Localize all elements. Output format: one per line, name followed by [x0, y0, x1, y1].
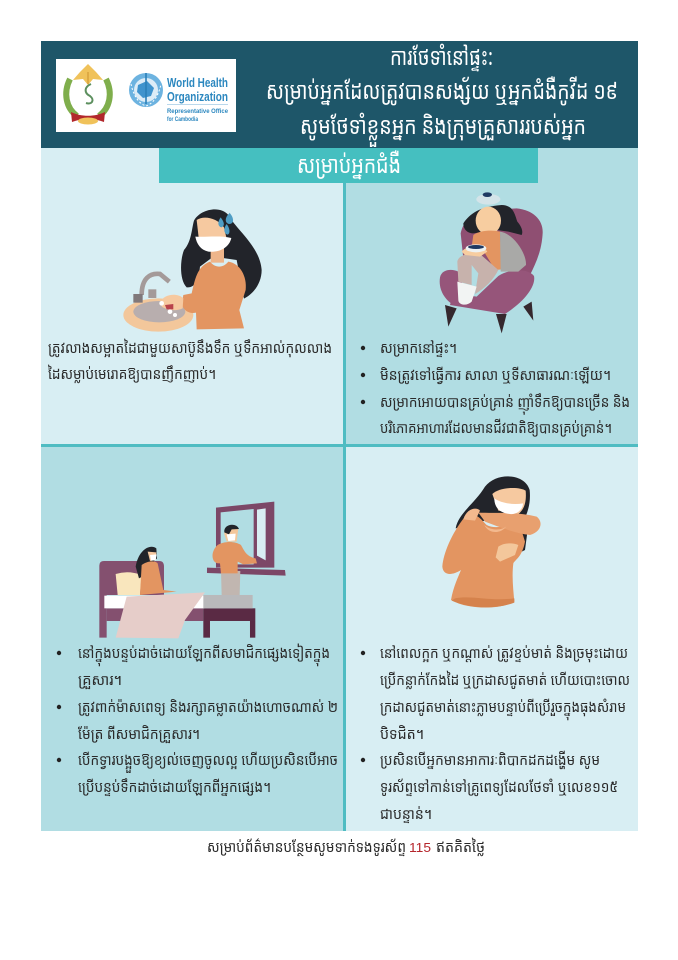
- footer note: ឥតគិតថ្លៃ: [436, 837, 485, 857]
- WHO wordmark: World Health: [167, 75, 228, 90]
- bullet list: នៅក្នុងបន្ទប់ដាច់ដោយឡែកពីសមាជិកផ្សេងទៀតក្នុង: [78, 643, 330, 666]
- bullet list: ទូរស័ព្ទទៅកាន់ទៅគ្រូពេទ្យដែលថែទាំ ឬលេខ១១៥: [380, 777, 618, 797]
- bullet list: បើកទ្វារបង្អួចឱ្យខ្យល់ចេញចូលល្អ ហើយប្រសិនបើអាច: [78, 750, 338, 773]
- bullet list: ជាបន្ទាន់។: [380, 804, 432, 824]
- text: [48, 338, 332, 384]
- icon: ministry of health emblem: [66, 64, 110, 124]
- panel: isolate in room: [57, 502, 338, 797]
- bullet list: បរិភោគអាហារដែលមានជីវជាតិឱ្យបានគ្រប់គ្រាន់។: [380, 418, 612, 438]
- bullet list: ម៉ែត្រ ពីសមាជិកគ្រួសារ។: [78, 724, 200, 744]
- panel: rest at home: [361, 192, 630, 438]
- WHO wordmark: Representative Office: [167, 108, 228, 115]
- bullet list: សម្រាកនៅផ្ទះ។: [380, 338, 457, 358]
- bullet list: ក្រដាសជូតមាត់នោះភ្លាមបន្ទាប់ពីប្រើរួចក្នុងធុងសំរាម: [380, 697, 626, 720]
- WHO wordmark: for Cambodia: [167, 116, 198, 123]
- footer note: សម្រាប់ព័ត៌មានបន្ថែមសូមទាក់ទងទូរស័ព្ទ: [207, 837, 406, 857]
- icon: bedroom with woman, man and window: [99, 502, 286, 638]
- panel: hand washing: [48, 209, 332, 384]
- bullet list: [57, 643, 338, 797]
- icon: woman coughing into elbow: [442, 476, 541, 607]
- logo box: [56, 59, 236, 132]
- bullet list: បិទជិត។: [380, 724, 424, 744]
- bullet list: គ្រួសារ។: [78, 670, 122, 690]
- bullet list: សម្រាកអោយបានគ្រប់គ្រាន់ ញ៉ាំទឹកឱ្យបានច្រើន និង: [380, 392, 630, 415]
- icon: woman in armchair: [440, 192, 543, 333]
- WHO wordmark: Organization: [167, 89, 228, 104]
- panel backgrounds: [41, 148, 638, 831]
- WHO wordmark: [167, 75, 228, 123]
- bullet list: ប្រើកន្លាក់កែងដៃ ឬក្រដាសជូតមាត់ ហើយបោះចោល: [380, 670, 630, 690]
- bullet list: ប្រើបន្ទប់ទឹកដាច់ដោយឡែកពីអ្នកផ្សេង។: [78, 777, 271, 797]
- icon: WHO globe: [129, 73, 163, 107]
- title: [266, 40, 618, 147]
- icon: woman washing hands: [123, 209, 262, 332]
- footer note: 115: [409, 840, 431, 855]
- bullet list: [361, 643, 630, 824]
- bullet list: ប្រសិនបើអ្នកមានអាការៈពិបាកដកដង្ហើម សូម: [380, 750, 600, 770]
- header banner: [41, 40, 638, 148]
- title: សូមថែទាំខ្លួនអ្នក និងក្រុមគ្រួសាររបស់អ្នក: [300, 109, 586, 147]
- text: ត្រូវលាងសម្អាតដៃជាមួយសាប៊ូនឹងទឹក ឬទឹកអាល់កុលលាង: [48, 338, 332, 358]
- title: ការថែទាំនៅផ្ទះ:: [390, 40, 493, 73]
- subheading bar: [159, 148, 538, 183]
- text: ដៃសម្លាប់មេរោគឱ្យបានញឹកញាប់។: [48, 364, 216, 384]
- bullet list: [361, 338, 630, 438]
- panel: cough etiquette: [361, 476, 630, 824]
- bullet list: មិនត្រូវទៅធ្វើការ សាលា ឬទីសាធារណៈឡើយ។: [380, 365, 611, 385]
- subheading bar: សម្រាប់អ្នកជំងឺ: [297, 148, 401, 181]
- bullet list: ត្រូវពាក់ម៉ាសពេទ្យ និងរក្សាគម្លាតយ៉ាងហោចណាស់ ២: [78, 697, 338, 717]
- bullet list: នៅពេលក្អក ឬកណ្តាស់ ត្រូវខ្ទប់មាត់ និងច្រមុះដោយ: [380, 643, 628, 663]
